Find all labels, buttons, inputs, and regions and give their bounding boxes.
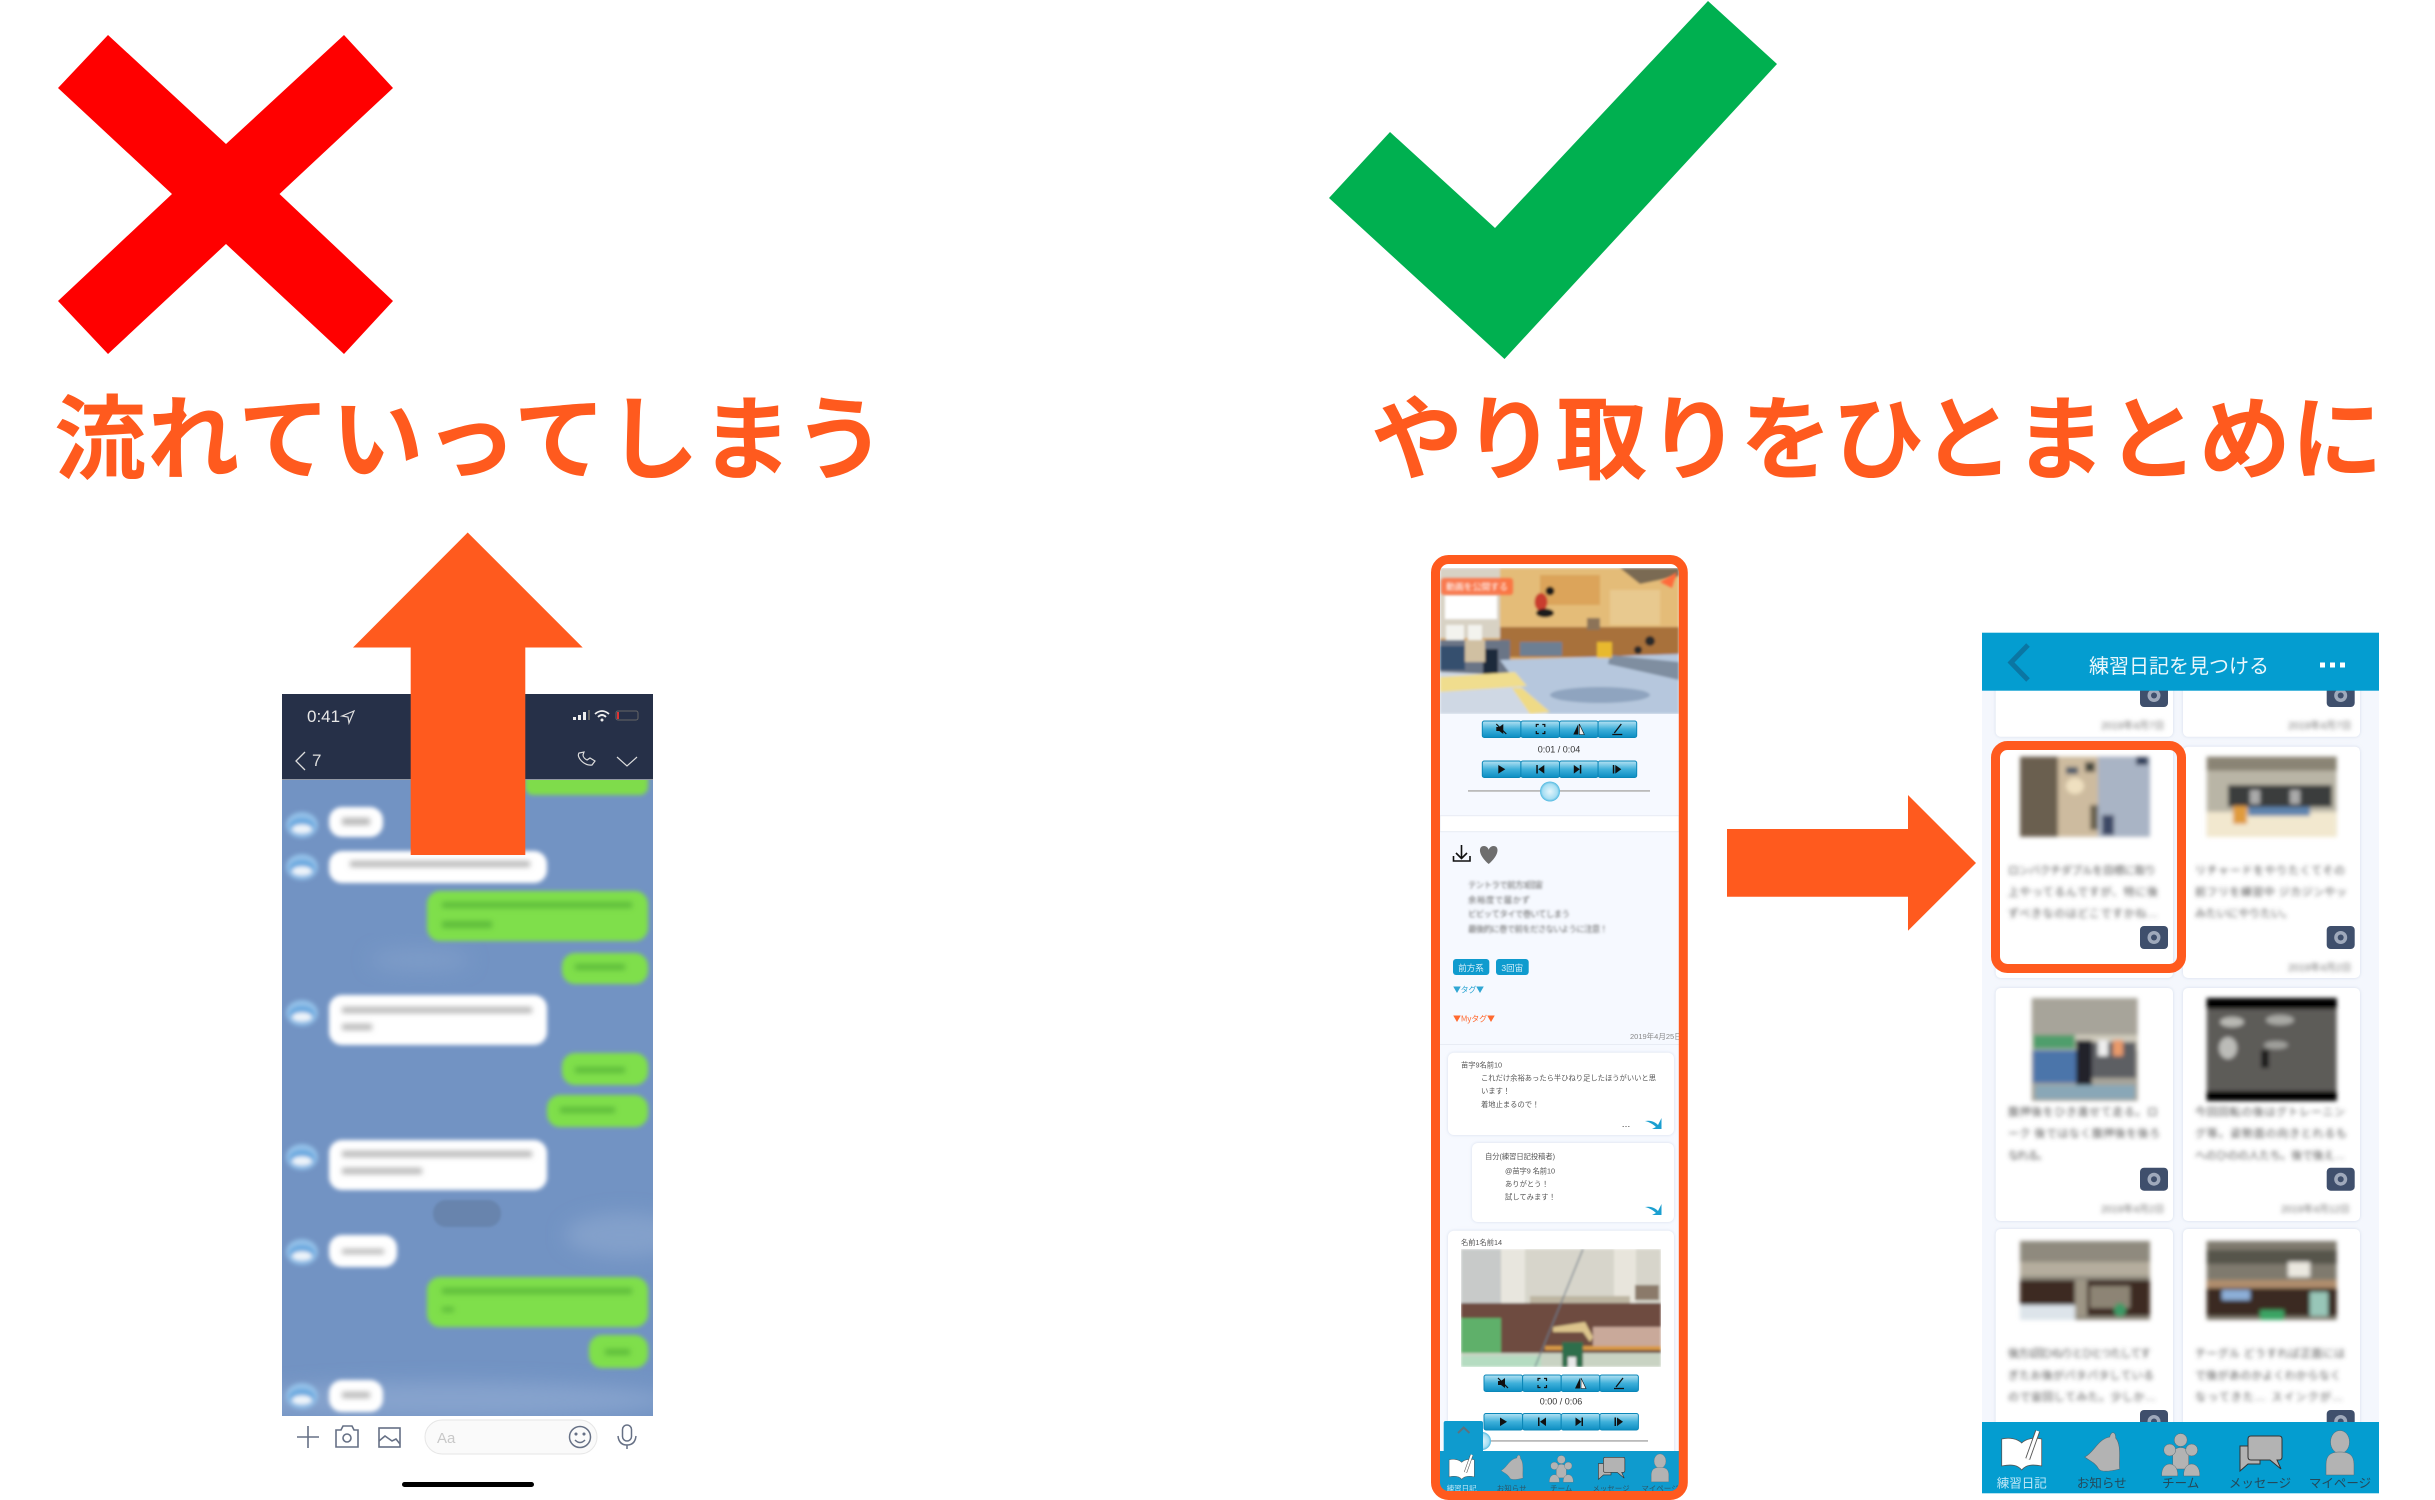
comment card 3 bbox=[1447, 1230, 1675, 1451]
card: row 2 right: 今回回転の後はグトレーニン bbox=[2195, 1104, 2345, 1118]
comment card 1: … bbox=[1622, 1119, 1630, 1129]
card: row 2 right: へのひのの人たち。後で後え… bbox=[2195, 1148, 2345, 1162]
card: row 3 right: なってきた… スインクが… bbox=[2195, 1390, 2343, 1404]
icon: plus bbox=[297, 1426, 319, 1448]
top cut green bubble bbox=[525, 780, 651, 798]
icon: picture bbox=[379, 1428, 400, 1447]
row 0 cards bbox=[1994, 690, 2361, 738]
video controls top row bbox=[1482, 721, 1637, 738]
header title: 練習日記を見つける bbox=[2089, 655, 2269, 678]
comment card 2: @苗字9 名前10 bbox=[1505, 1166, 1555, 1175]
publish badge: 動画を公開する bbox=[1446, 582, 1508, 592]
comment card 2: 自分(練習日記投稿者) bbox=[1485, 1152, 1555, 1161]
comment card 3: 名前1名前14 bbox=[1461, 1238, 1502, 1247]
blurred post body bbox=[1468, 880, 1608, 934]
icon: heart bbox=[1480, 846, 1498, 864]
blurred green bubble text bbox=[442, 902, 632, 1355]
icon: microphone bbox=[618, 1425, 636, 1449]
bottom navigation: 練習日記 bbox=[1447, 1483, 1477, 1493]
row 0 cards: 2019年4月7日 bbox=[2288, 719, 2351, 732]
bottom navigation: チーム bbox=[1550, 1484, 1572, 1493]
card: row 3 left bbox=[1996, 1229, 2173, 1449]
post date: 2019年4月25日 bbox=[1630, 1031, 1682, 1041]
comment card 2: 試してみます！ bbox=[1505, 1192, 1556, 1201]
heading: consolidate exchanges: やり取りをひとまとめに bbox=[1371, 366, 2383, 499]
nav labels: チーム bbox=[2162, 1476, 2199, 1490]
back label: 7 bbox=[312, 751, 321, 770]
tag: forward bbox=[1453, 959, 1489, 975]
icon: red cross bbox=[58, 35, 393, 354]
nav labels: お知らせ bbox=[2077, 1476, 2127, 1490]
tag: triple: 3回宙 bbox=[1501, 963, 1523, 973]
icon: back chevron bbox=[2011, 645, 2028, 680]
comment card 1: これだけ余裕あったら半ひねり足したほうがいいと思 bbox=[1481, 1074, 1656, 1082]
publish badge bbox=[1441, 578, 1513, 595]
icon: more dots bbox=[2320, 662, 2345, 668]
seek slider bbox=[1468, 782, 1650, 802]
nav labels: メッセージ bbox=[2229, 1476, 2291, 1490]
comment card 3: 0:00 / 0:06 bbox=[1540, 1396, 1582, 1406]
blurred post body: テントラで前方3回宙 bbox=[1468, 880, 1543, 890]
right arrow bbox=[1727, 795, 1976, 931]
avatars bbox=[286, 812, 318, 1409]
icon: team bbox=[2162, 1434, 2200, 1476]
card: row 2 left: ーク 後ではなく腹押後を後ろ bbox=[2008, 1126, 2160, 1140]
blurred post body: 最後的に巻で前をださないように注意！ bbox=[1468, 924, 1608, 934]
card: row 2 left: 2019年4月2日 bbox=[2101, 1202, 2164, 1216]
card: row 2 left: 腹押後をひき進せて走る。ロ bbox=[2008, 1104, 2158, 1118]
card: row 3 left: ぎたお後がパタパタしている bbox=[2008, 1368, 2154, 1382]
comment card 1 bbox=[1448, 1053, 1674, 1135]
gym photo bbox=[1461, 1249, 1661, 1367]
icon: messages bbox=[2240, 1436, 2282, 1471]
card: row 1 right: リチャードをやりたくてその bbox=[2195, 864, 2345, 877]
icon: my page bbox=[2326, 1430, 2354, 1475]
input toolbar bbox=[297, 1420, 636, 1487]
home indicator bbox=[402, 1482, 534, 1487]
bottom navigation: メッセージ bbox=[1592, 1484, 1630, 1493]
tag: triple bbox=[1496, 959, 1529, 975]
icon: download bbox=[1454, 845, 1470, 861]
green chat bubbles bbox=[427, 891, 648, 1368]
message input bbox=[425, 1420, 597, 1454]
blurred post body: 余裕度で届かず bbox=[1468, 895, 1530, 905]
chat background bbox=[282, 780, 653, 1416]
comment card 2 bbox=[1472, 1143, 1674, 1222]
card: row 1 right: みたいにやりたい。 bbox=[2195, 907, 2293, 920]
icon: phone and chevron bbox=[578, 752, 637, 766]
white chat bubbles bbox=[329, 807, 547, 1412]
icon: corner flag bbox=[1660, 572, 1677, 588]
list background bbox=[1982, 690, 2379, 1422]
bottom navigation bbox=[1982, 1422, 2379, 1493]
video controls bottom row bbox=[1482, 761, 1637, 778]
bottom navigation bbox=[1440, 1451, 1679, 1493]
card: row 3 right: テーグル どうすれば正面には bbox=[2195, 1346, 2345, 1360]
status bar time: 0:41 bbox=[307, 707, 340, 726]
panel: chat screenshot bbox=[282, 532, 653, 1487]
row 0 cards: 2019年4月7日 bbox=[2101, 719, 2164, 732]
phone header bar bbox=[282, 694, 653, 780]
card: row 3 left: 後方1回ひねりとひとつたしてす bbox=[2008, 1346, 2151, 1360]
up arrow bbox=[353, 532, 583, 855]
orange frame around post bbox=[1436, 560, 1683, 1496]
date pill bbox=[433, 1200, 501, 1227]
card: row 1 left: ロンバクチダブルを目標に取り bbox=[2008, 863, 2156, 877]
nav labels: 練習日記 bbox=[1997, 1476, 2047, 1490]
card: row 3 right: で後があのかよくわからなく bbox=[2195, 1368, 2341, 1382]
card: row 1 right: 2019年4月2日 bbox=[2288, 961, 2351, 974]
icon: diary bbox=[2002, 1431, 2042, 1470]
nav labels: マイページ bbox=[2309, 1476, 2371, 1490]
card: row 1 left: ずべきなのはどこですかね… bbox=[2008, 907, 2158, 920]
spacer band bbox=[1440, 816, 1679, 832]
card: row 3 right bbox=[2183, 1229, 2360, 1449]
card: row 2 right bbox=[2183, 988, 2360, 1221]
panel: threaded post screenshot bbox=[1436, 560, 1683, 1500]
nav labels bbox=[1997, 1476, 2371, 1490]
bottom navigation: お知らせ bbox=[1497, 1483, 1527, 1493]
back label bbox=[296, 751, 321, 770]
comment card 1: 着地止まるので！ bbox=[1481, 1100, 1539, 1109]
card: row 1 left: 上やってるんですが、特に後 bbox=[2008, 884, 2158, 898]
heading: flows away: 流れていってしまう bbox=[54, 366, 886, 499]
post screen content bbox=[1440, 564, 1682, 1500]
tag: forward: 前方系 bbox=[1458, 963, 1484, 973]
comment card 1: 苗字9名前10 bbox=[1461, 1060, 1502, 1070]
card: row 3 left: ので宙回してみた。少しか… bbox=[2008, 1390, 2156, 1404]
card: row 1 right: 前フリを練習中 ジカジンやッ bbox=[2195, 884, 2347, 898]
icon: emoji bbox=[570, 1426, 590, 1448]
my tag heading: ▼Myタグ▼ bbox=[1453, 1014, 1495, 1024]
card: row 1 right bbox=[2183, 747, 2360, 978]
icon: location bbox=[342, 711, 354, 723]
bottom navigation: マイページ bbox=[1641, 1484, 1679, 1493]
icon: camera bbox=[336, 1426, 358, 1447]
card: row 2 right: 2019年4月12日 bbox=[2281, 1202, 2350, 1216]
video photo bbox=[1440, 568, 1679, 714]
input placeholder: Aa bbox=[437, 1430, 456, 1447]
tag heading: ▼タグ▼ bbox=[1453, 984, 1484, 996]
orange highlight frame bbox=[1996, 746, 2182, 968]
comment card 1: います！ bbox=[1481, 1087, 1510, 1096]
video time: 0:01 / 0:04 bbox=[1538, 744, 1580, 754]
card: row 2 left bbox=[1996, 988, 2173, 1221]
blurred white bubble text bbox=[342, 818, 532, 1398]
icon: green check mark bbox=[1329, 1, 1777, 359]
list header bar bbox=[1982, 633, 2379, 691]
icon: signal, wifi, battery bbox=[573, 710, 638, 722]
card: row 1 left bbox=[1996, 747, 2173, 978]
blurred post body: ビビッてタイで巻いてしまう bbox=[1468, 909, 1570, 919]
diary cards grid bbox=[1996, 650, 2360, 1449]
comment card 2: ありがとう！ bbox=[1505, 1179, 1549, 1188]
icon: notification bell bbox=[2085, 1433, 2120, 1471]
scroll up button bbox=[1444, 1421, 1483, 1453]
card: row 2 right: グ等。姿勢面の向きとれるも bbox=[2195, 1126, 2347, 1140]
panel: diary list screenshot bbox=[1982, 633, 2379, 1493]
card: row 2 left: なれる。 bbox=[2008, 1149, 2048, 1162]
